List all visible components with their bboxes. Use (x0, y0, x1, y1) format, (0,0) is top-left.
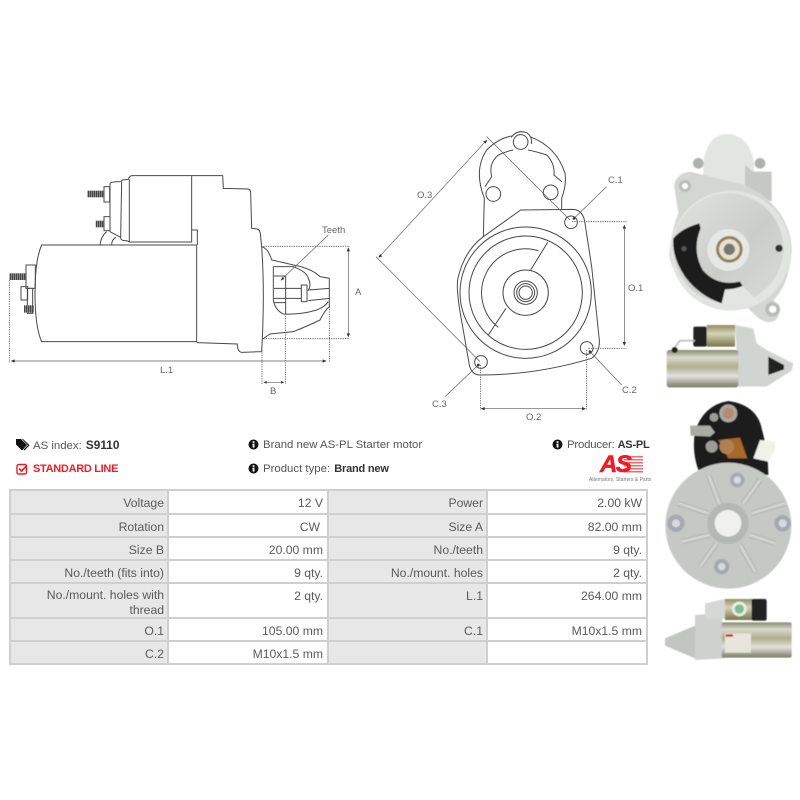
row: voltage and power (11, 491, 646, 513)
row: voltage and power: Power (448, 496, 483, 510)
row: threaded holes and L.1: L.1 (466, 589, 483, 603)
logo stripes (624, 456, 643, 472)
front view technical drawing (376, 132, 627, 410)
top bracket (479, 132, 565, 237)
info row: AS index: AS index: S9110 (33, 438, 119, 452)
row: size B and teeth (11, 538, 646, 559)
icon: tags (16, 439, 30, 450)
row: rotation and size A: Size A (448, 520, 483, 534)
front view dimension labels: O.3 (417, 190, 432, 201)
row: teeth fits into and mounting holes: No./teeth (fits into) (64, 566, 164, 580)
photo: starter side view (667, 325, 793, 387)
row: size B and teeth: 20.00 mm (269, 543, 323, 557)
front view dimension labels: C.1 (608, 175, 623, 186)
icon: info (248, 464, 258, 474)
row: threaded holes and L.1: No./mount. holes with thread (47, 588, 164, 617)
concentric flange circles (460, 227, 591, 358)
row: size B and teeth: Size B (129, 543, 164, 557)
row: O.1 and C.1: C.1 (464, 624, 483, 638)
row: O.1 and C.1: 105.00 mm (262, 624, 323, 638)
drive nose with pinion (262, 247, 329, 339)
row: size B and teeth: No./teeth (434, 543, 483, 557)
mounting plate outline (457, 209, 599, 375)
side view dimension labels: Teeth (322, 225, 345, 236)
side view dimension labels: A (355, 287, 362, 298)
info row: producer: Producer: AS-PL (567, 439, 650, 451)
row: teeth fits into and mounting holes: No./mount. holes (391, 566, 483, 580)
row: rotation and size A: CW (300, 520, 320, 534)
drive housing and solenoid (100, 176, 263, 352)
dimension lines (481, 222, 627, 410)
row: rotation and size A: Rotation (119, 520, 164, 534)
row: size B and teeth: 9 qty. (613, 543, 642, 557)
dimension lines (9, 246, 350, 384)
row: C.2: C.2 (145, 647, 164, 661)
photo: starter front flange view (669, 134, 792, 322)
row: voltage and power: 2.00 kW (597, 496, 642, 510)
specifications table (9, 489, 648, 665)
standard line badge: STANDARD LINE (33, 463, 118, 475)
row: threaded holes and L.1: 2 qty. (294, 589, 323, 603)
row: teeth fits into and mounting holes (11, 561, 646, 582)
front view dimension labels: O.1 (628, 283, 643, 294)
photo: starter rear solenoid view (665, 401, 791, 589)
icon: red checkbox (16, 464, 28, 475)
row: O.1 and C.1: O.1 (144, 624, 164, 638)
icon: info (248, 440, 258, 450)
side view dimension labels: B (270, 386, 276, 397)
row: teeth fits into and mounting holes: 9 qty. (294, 566, 323, 580)
row: rotation and size A: 82.00 mm (588, 520, 642, 534)
AS-PL logo: AS (600, 451, 630, 478)
info row: description: Brand new AS-PL Starter motor (263, 439, 422, 451)
row: O.1 and C.1 (11, 619, 646, 640)
row: voltage and power: Voltage (123, 496, 164, 510)
row: O.1 and C.1: M10x1.5 mm (572, 624, 642, 638)
mounting holes (475, 216, 593, 368)
front view dimension labels: C.3 (432, 399, 447, 410)
row: C.2 (11, 642, 646, 663)
AS-PL logo: Alternators, Starters & Parts (589, 477, 651, 483)
row: threaded holes and L.1: 264.00 mm (581, 589, 642, 603)
front view dimension labels: C.2 (622, 385, 637, 396)
row: teeth fits into and mounting holes: 2 qty. (613, 566, 642, 580)
row: rotation and size A (11, 515, 646, 536)
front view dimension labels: O.2 (526, 412, 541, 423)
side view dimension labels: L.1 (160, 365, 173, 376)
AS-PL logo (589, 451, 652, 483)
photo: starter side view, nose left (665, 599, 792, 660)
row: C.2: M10x1.5 mm (253, 647, 323, 661)
side view dimension labels (160, 225, 362, 397)
info row: product type: Product type: Brand new (263, 463, 389, 475)
motor body (35, 245, 197, 342)
row: voltage and power: 12 V (298, 496, 323, 510)
icon: info (552, 440, 562, 450)
terminal studs (9, 187, 110, 313)
row: threaded holes and L.1 (11, 584, 646, 617)
front view dimension labels (417, 175, 643, 423)
